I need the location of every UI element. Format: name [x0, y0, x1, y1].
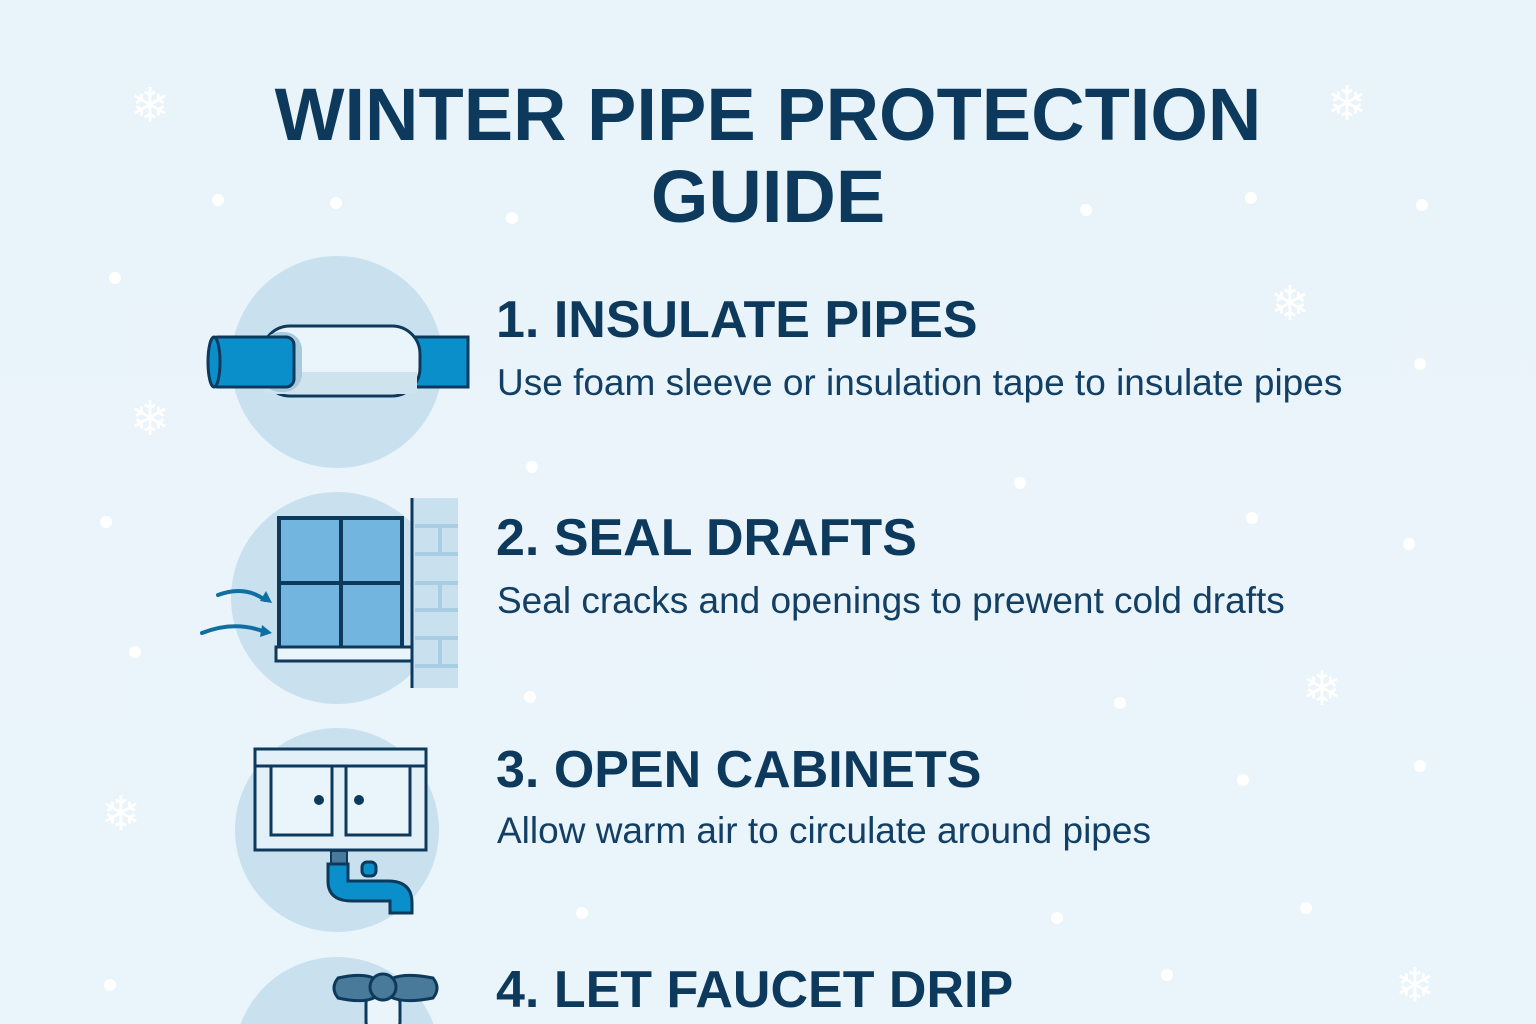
heading 3: 3. OPEN CABINETS	[496, 741, 981, 799]
background snow: ❄	[1302, 661, 1342, 717]
background snow: ❄	[101, 786, 141, 842]
heading 4: 4. LET FAUCET DRIP	[496, 961, 1013, 1019]
background snow: ❄	[1327, 76, 1367, 132]
background snow: ❄	[130, 78, 170, 134]
heading 2: 2. SEAL DRAFTS	[496, 509, 917, 567]
title	[274, 73, 1261, 238]
heading 1: 1. INSULATE PIPES	[496, 291, 978, 349]
title: GUIDE	[651, 155, 885, 238]
background snow: ❄	[1395, 958, 1435, 1014]
text 3: Allow warm air to circulate around pipes	[497, 810, 1151, 851]
text 1: Use foam sleeve or insulation tape to insulate pipes	[497, 362, 1342, 403]
background snow: ❄	[130, 391, 170, 447]
text 2: Seal cracks and openings to prewent cold drafts	[497, 580, 1285, 621]
background snow: ❄	[1270, 276, 1310, 332]
title: WINTER PIPE PROTECTION	[275, 73, 1261, 156]
